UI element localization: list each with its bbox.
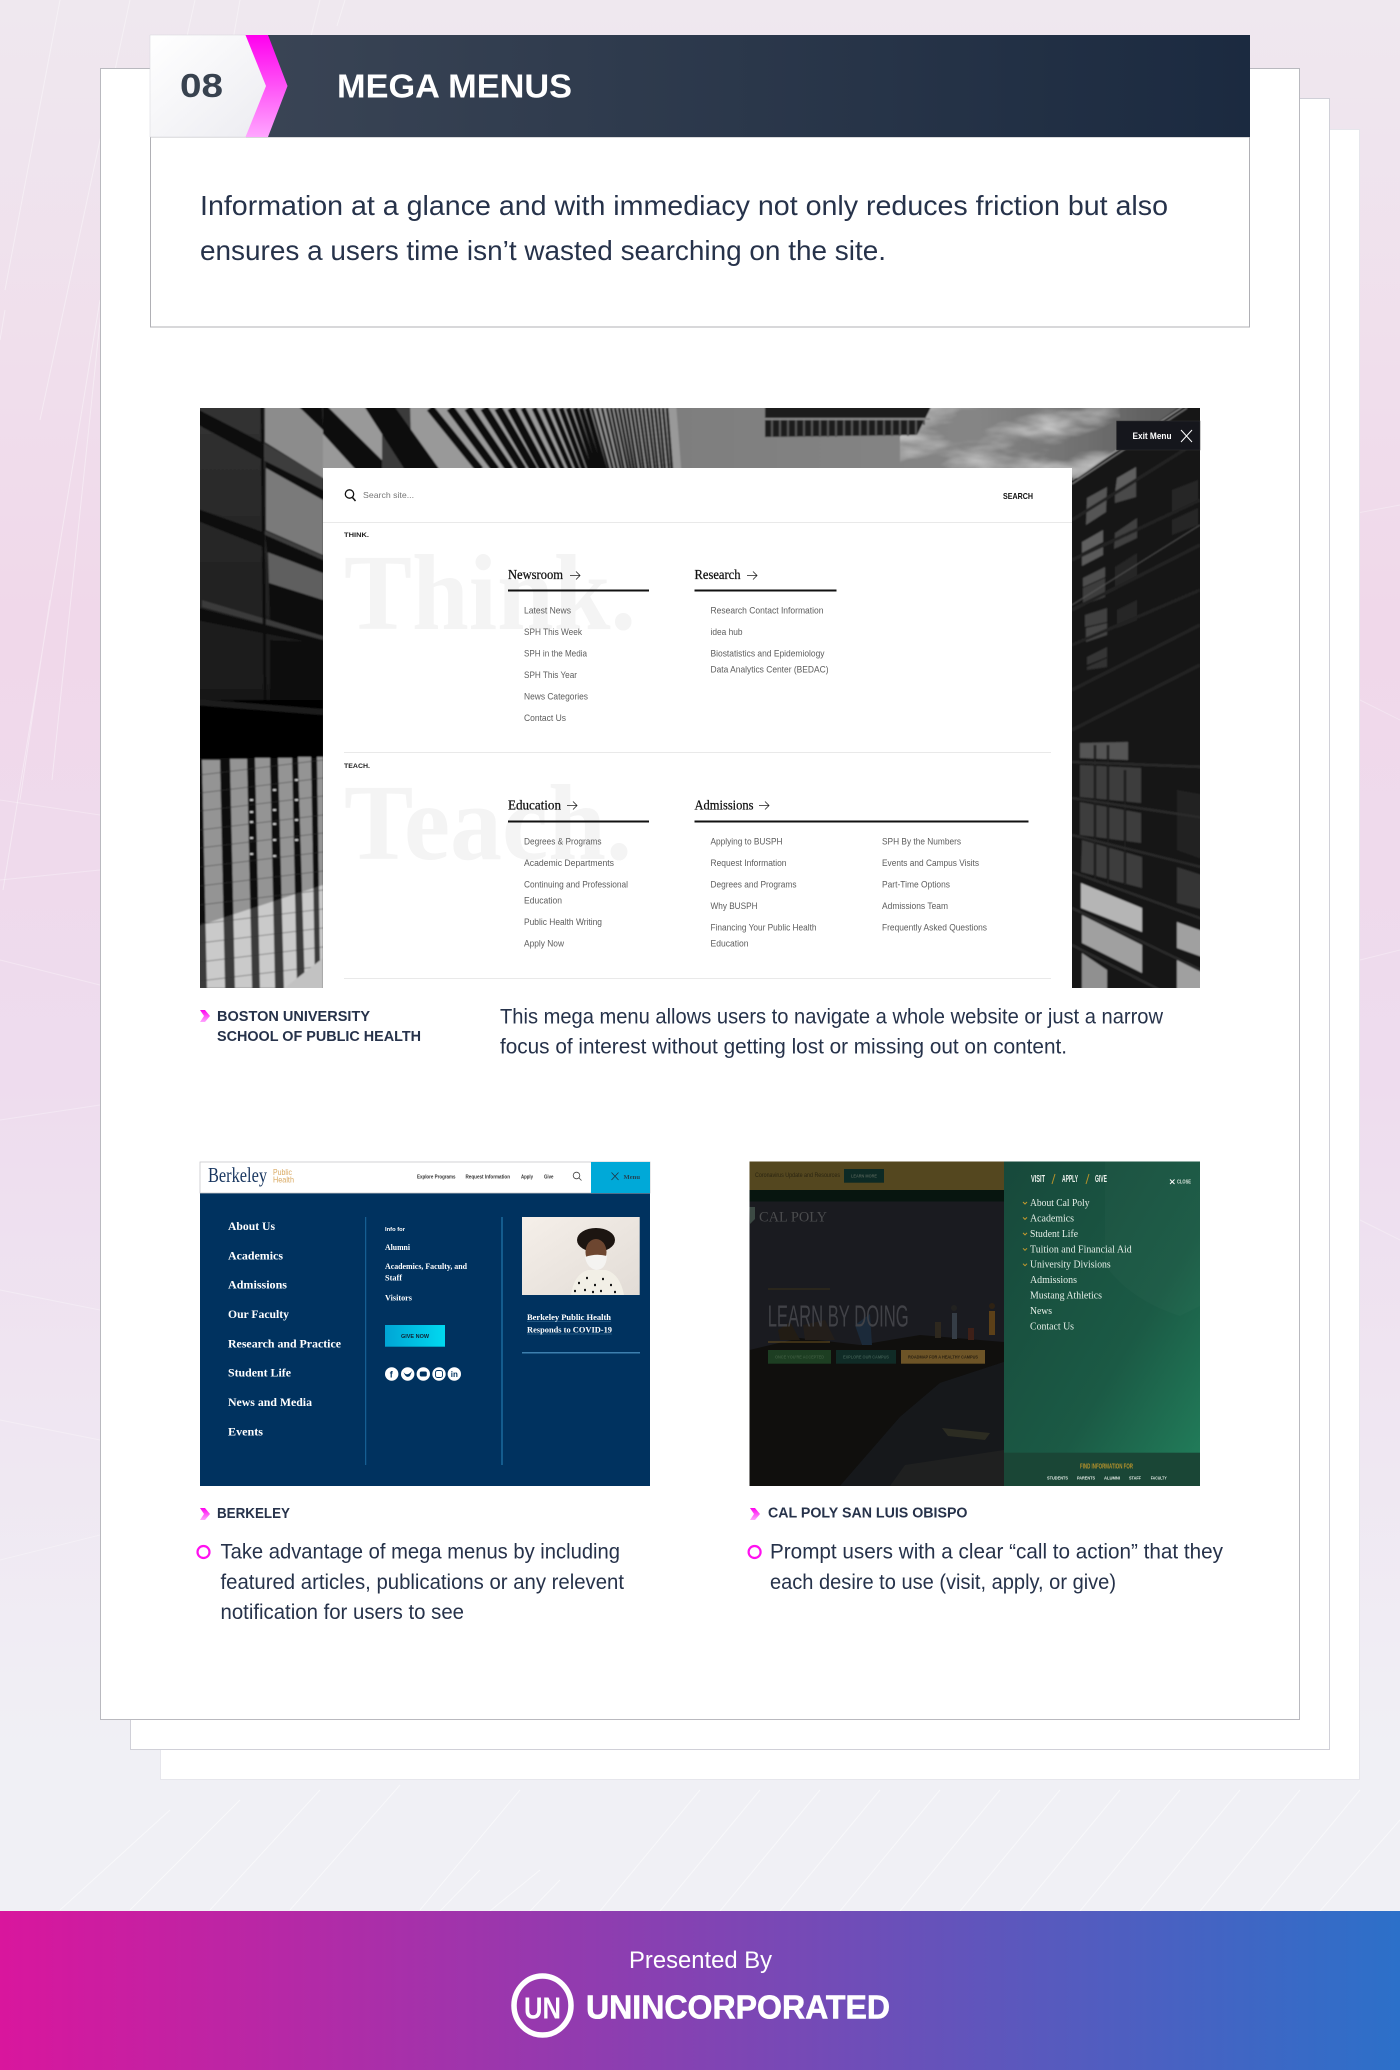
berkeley main menu: Our Faculty bbox=[228, 1309, 289, 1321]
hero buttons: EXPLORE OUR CAMPUS bbox=[843, 1354, 889, 1360]
unincorporated logo: UNINCORPORATED bbox=[586, 1988, 890, 2026]
admissions column: Frequently Asked Questions bbox=[882, 922, 987, 932]
berkeley top bar: Request Information bbox=[466, 1174, 510, 1180]
cal poly menu items: About Cal Poly bbox=[1030, 1198, 1090, 1209]
caption label: BERKELEY bbox=[217, 1506, 290, 1522]
visit apply give links: GIVE bbox=[1095, 1174, 1107, 1185]
research column: Research bbox=[694, 568, 740, 583]
newsroom column: Latest News bbox=[524, 606, 571, 616]
caption label bbox=[217, 1009, 421, 1045]
number block bbox=[150, 35, 267, 137]
find information footer: ALUMNI bbox=[1104, 1476, 1120, 1480]
education column: Continuing and Professional bbox=[524, 880, 628, 890]
admissions column: Applying to BUSPH bbox=[710, 836, 782, 846]
header bar bbox=[150, 35, 1250, 137]
chevron marker bbox=[750, 1508, 760, 1520]
unincorporated logo: UN bbox=[524, 1991, 561, 2026]
bullet marker bbox=[749, 1546, 761, 1558]
cal poly menu items: Student Life bbox=[1030, 1229, 1078, 1240]
berkeley main menu: Research and Practice bbox=[228, 1338, 341, 1350]
give now button: GIVE NOW bbox=[401, 1334, 429, 1340]
section header card bbox=[150, 35, 1250, 327]
presented by: Presented By bbox=[629, 1947, 772, 1974]
title: MEGA MENUS bbox=[337, 68, 572, 104]
intro text: Information at a glance and with immediacy not only reduces friction but also bbox=[200, 190, 1168, 221]
admissions column: Admissions bbox=[694, 798, 754, 814]
newsroom column: Newsroom bbox=[508, 568, 563, 583]
shield watermark bbox=[1105, 1162, 1200, 1316]
caption description: This mega menu allows users to navigate a whole website or just a narrow bbox=[500, 1006, 1164, 1028]
berkeley main menu: Academics bbox=[228, 1250, 284, 1262]
exit menu button: Exit Menu bbox=[1132, 431, 1172, 442]
newsroom column bbox=[508, 568, 649, 723]
people silhouettes bbox=[778, 1303, 995, 1345]
research column: idea hub bbox=[710, 627, 742, 637]
watermark: Teach: Teach. bbox=[344, 764, 632, 883]
social icons bbox=[385, 1367, 461, 1381]
bullet text: Prompt users with a clear “call to action” that they bbox=[770, 1540, 1223, 1564]
cal poly hero photo bbox=[750, 1162, 1004, 1486]
green menu panel bbox=[1004, 1162, 1200, 1486]
cal poly menu items: Admissions bbox=[1030, 1275, 1077, 1286]
footer band bbox=[0, 1911, 1400, 2070]
berkeley main menu: About Us bbox=[228, 1221, 276, 1233]
education column: Apply Now bbox=[524, 938, 564, 948]
think section: THINK. bbox=[344, 532, 369, 539]
berkeley top bar: Explore Programs bbox=[417, 1174, 456, 1180]
close control: CLOSE bbox=[1177, 1180, 1192, 1186]
find information footer: FACULTY bbox=[1151, 1476, 1167, 1480]
search row: SEARCH bbox=[1003, 491, 1033, 501]
left building lower striped facade bbox=[195, 755, 323, 993]
berkeley main menu bbox=[228, 1221, 341, 1438]
floating building block bbox=[764, 408, 932, 438]
admissions column: Part-Time Options bbox=[882, 880, 950, 890]
bullet marker bbox=[198, 1546, 210, 1558]
berkeley top bar: Public bbox=[273, 1167, 293, 1177]
chevron marker bbox=[200, 1508, 210, 1520]
visit apply give links bbox=[1031, 1174, 1107, 1185]
hero buttons bbox=[768, 1350, 985, 1364]
unincorporated logo bbox=[514, 1976, 890, 2035]
building photo bbox=[195, 403, 1205, 993]
newsroom column: Contact Us bbox=[524, 713, 566, 723]
featured story link bbox=[527, 1312, 612, 1335]
newsroom column: News Categories bbox=[524, 692, 588, 702]
berkeley main menu: Events bbox=[228, 1426, 264, 1438]
berkeley info column: Visitors bbox=[385, 1294, 412, 1303]
admissions column: Degrees and Programs bbox=[710, 880, 797, 890]
research column: Biostatistics and Epidemiology bbox=[710, 648, 825, 658]
berkeley info column bbox=[385, 1227, 468, 1303]
section number: 08 bbox=[180, 67, 223, 104]
berkeley top bar: Menu bbox=[624, 1175, 641, 1181]
admissions column: Education bbox=[710, 938, 748, 948]
find information footer: STUDENTS bbox=[1047, 1476, 1068, 1480]
education column: Degrees & Programs bbox=[524, 836, 602, 846]
caption label: BOSTON UNIVERSITY bbox=[217, 1009, 370, 1025]
berkeley top bar: Health bbox=[273, 1174, 294, 1184]
admissions column: Request Information bbox=[710, 858, 786, 868]
bullet text: Take advantage of mega menus by including bbox=[220, 1540, 620, 1564]
caption label: CAL POLY SAN LUIS OBISPO bbox=[768, 1506, 968, 1522]
cal poly menu items: Tuition and Financial Aid bbox=[1030, 1244, 1132, 1255]
visit apply give links: VISIT bbox=[1031, 1174, 1045, 1185]
left building wall and windows bbox=[195, 403, 323, 760]
berkeley top bar: Berkeley bbox=[208, 1163, 267, 1187]
teach section: TEACH. bbox=[344, 763, 370, 770]
watermark: Think: Think. bbox=[344, 534, 636, 653]
caption description bbox=[500, 1006, 1164, 1058]
intro text: ensures a users time isn’t wasted searching on the site. bbox=[200, 235, 886, 266]
search row bbox=[345, 490, 1033, 501]
search row: Search site... bbox=[363, 490, 414, 500]
intro card box bbox=[150, 137, 1250, 327]
berkeley info column: Alumni bbox=[385, 1243, 411, 1252]
cal poly menu items: Mustang Athletics bbox=[1030, 1291, 1102, 1302]
teach section bbox=[344, 763, 1028, 948]
coronavirus notice: LEARN MORE bbox=[851, 1174, 877, 1178]
cal poly menu items bbox=[1030, 1198, 1132, 1332]
berkeley screenshot bbox=[200, 1162, 650, 1486]
visit apply give links: APPLY bbox=[1062, 1174, 1078, 1185]
bullet text: notification for users to see bbox=[220, 1601, 464, 1624]
admissions column: Events and Campus Visits bbox=[882, 858, 979, 868]
cal poly caption bbox=[749, 1506, 1223, 1594]
chevron marker bbox=[200, 1010, 210, 1022]
bullet text bbox=[220, 1540, 624, 1624]
berkeley main menu: News and Media bbox=[228, 1397, 312, 1409]
newsroom column: SPH in the Media bbox=[524, 648, 587, 658]
berkeley info column: Info for bbox=[385, 1227, 406, 1233]
research column bbox=[694, 568, 836, 674]
berkeley info column: Academics, Faculty, and bbox=[385, 1262, 468, 1271]
paper stack bbox=[100, 68, 1360, 1780]
newsroom column: SPH This Week bbox=[524, 627, 582, 637]
cal poly screenshot bbox=[750, 1162, 1200, 1486]
find information footer: FIND INFORMATION FOR bbox=[1080, 1464, 1133, 1471]
berkeley main menu: Student Life bbox=[228, 1368, 291, 1380]
bullet text: each desire to use (visit, apply, or give) bbox=[770, 1571, 1116, 1594]
admissions column: Financing Your Public Health bbox=[710, 922, 816, 932]
berkeley top bar: Apply bbox=[521, 1174, 533, 1180]
bullet text bbox=[770, 1540, 1223, 1594]
cal poly menu items: Contact Us bbox=[1030, 1322, 1074, 1332]
close control bbox=[1170, 1180, 1192, 1186]
find information footer: STAFF bbox=[1129, 1476, 1141, 1480]
think section bbox=[344, 532, 836, 723]
learn by doing headline: LEARN BY DOING bbox=[768, 1299, 909, 1334]
left building upper facade bbox=[322, 408, 682, 479]
coronavirus notice: Coronavirus Update and Resources bbox=[755, 1173, 840, 1179]
featured story link: Responds to COVID-19 bbox=[527, 1325, 612, 1335]
hero screenshot: Boston University mega menu bbox=[195, 403, 1205, 993]
berkeley top bar: Give bbox=[544, 1174, 554, 1180]
newsroom column: SPH This Year bbox=[524, 670, 577, 680]
admissions column: SPH By the Numbers bbox=[882, 836, 961, 846]
admissions column: Admissions Team bbox=[882, 901, 948, 911]
find information footer: PARENTS bbox=[1077, 1476, 1095, 1480]
exit menu button bbox=[1116, 421, 1200, 450]
magenta chevron bbox=[246, 35, 288, 137]
education column: Public Health Writing bbox=[524, 917, 602, 927]
berkeley top bar bbox=[200, 1162, 650, 1193]
caption label: SCHOOL OF PUBLIC HEALTH bbox=[217, 1029, 421, 1045]
education column bbox=[508, 798, 649, 948]
find information footer bbox=[1004, 1453, 1200, 1486]
hero buttons: ONCE YOU'RE ACCEPTED bbox=[775, 1354, 825, 1360]
boston university caption bbox=[200, 1006, 1164, 1058]
right building bbox=[1072, 403, 1205, 993]
berkeley info column: Staff bbox=[385, 1274, 402, 1283]
admissions column bbox=[694, 798, 1028, 948]
cal poly menu items: Academics bbox=[1030, 1213, 1074, 1224]
education column: Academic Departments bbox=[524, 858, 614, 868]
admissions column: Why BUSPH bbox=[710, 901, 758, 911]
education column: Education bbox=[508, 798, 561, 814]
menu chevrons bbox=[1023, 1202, 1027, 1266]
social icons: in bbox=[451, 1370, 458, 1379]
cal poly wordmark: CAL POLY bbox=[759, 1210, 827, 1226]
give now button bbox=[385, 1325, 445, 1347]
berkeley caption bbox=[198, 1506, 624, 1624]
caption description: focus of interest without getting lost or missing out on content. bbox=[500, 1036, 1067, 1058]
research column: Data Analytics Center (BEDAC) bbox=[710, 664, 828, 674]
bullet text: featured articles, publications or any relevent bbox=[220, 1571, 624, 1594]
sky and clouds bbox=[676, 408, 1178, 479]
coronavirus notice bbox=[755, 1169, 884, 1183]
education column: Education bbox=[524, 896, 562, 906]
berkeley main menu: Admissions bbox=[228, 1280, 288, 1292]
cal poly menu items: University Divisions bbox=[1030, 1260, 1111, 1271]
cal poly menu items: News bbox=[1030, 1306, 1052, 1317]
white menu panel bbox=[323, 468, 1072, 988]
intro text bbox=[200, 190, 1168, 266]
social icons: f bbox=[390, 1370, 394, 1380]
research column: Research Contact Information bbox=[710, 606, 824, 616]
featured photo bbox=[522, 1217, 640, 1295]
featured story link: Berkeley Public Health bbox=[527, 1312, 611, 1322]
hero buttons: ROADMAP FOR A HEALTHY CAMPUS bbox=[908, 1354, 978, 1360]
